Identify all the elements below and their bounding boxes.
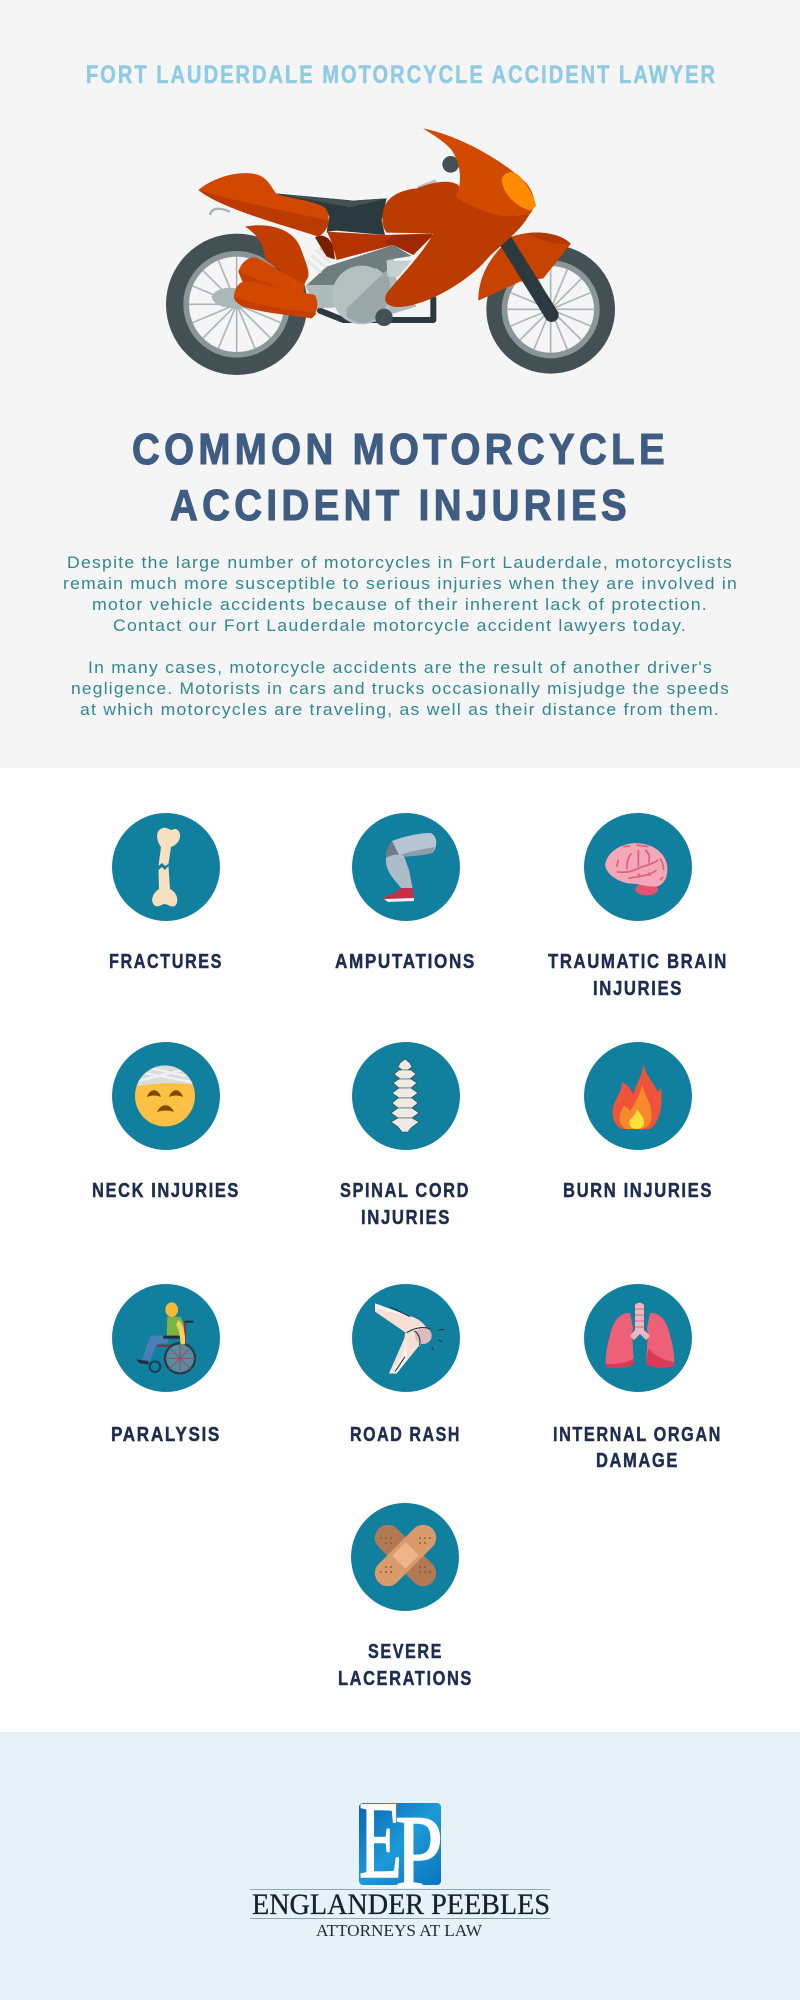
item: internal organ damage [553,1284,722,1472]
icon: bandaged face [112,1042,220,1150]
logo mark: P [395,1793,443,1910]
item: spinal cord injuries [340,1042,470,1229]
label: INJURIES [593,977,683,1000]
item: road rash [350,1284,461,1446]
label: ROAD RASH [350,1423,461,1446]
tagline: ATTORNEYS AT LAW [316,1921,482,1940]
label: INJURIES [361,1206,451,1229]
label: SEVERE [368,1640,443,1663]
icon: scraped knee [352,1284,460,1392]
item: burn injuries [563,1042,713,1202]
text block: intro paragraph: Despite the large number of motorcycles in Fort Lauderdale, motorcyclists [67,553,733,572]
panel: footer [0,1732,800,2000]
heading [132,425,669,530]
icon: broken bone [112,813,220,921]
icon: prosthetic leg [352,813,460,921]
text block: intro paragraph: Contact our Fort Lauderdale motorcycle accident lawyers today. [113,616,687,635]
icon: wheelchair user [112,1284,220,1392]
label: DAMAGE [596,1449,679,1472]
illustration: motorcycle [166,128,615,375]
label: TRAUMATIC BRAIN [548,950,728,973]
label [548,950,728,1000]
icon: crossed bandages [351,1503,459,1611]
icon: brain [584,813,692,921]
heading: ACCIDENT INJURIES [170,481,631,530]
label: NECK INJURIES [92,1179,240,1202]
item: traumatic brain injuries [548,813,728,1000]
label: SPINAL CORD [340,1179,470,1202]
heading: COMMON MOTORCYCLE [132,425,669,474]
icon: spine [352,1042,460,1150]
item: amputations [335,813,476,973]
item: paralysis [111,1284,221,1446]
text block: intro paragraph [63,553,738,635]
text block: second paragraph: In many cases, motorcycle accidents are the result of another driver's [88,658,713,677]
icon: lungs [584,1284,692,1392]
label: BURN INJURIES [563,1179,713,1202]
logo: Englander Peebles [250,1779,550,1940]
text block: second paragraph [71,658,730,719]
firm name: ENGLANDER PEEBLES [252,1888,550,1921]
label: INTERNAL ORGAN [553,1423,722,1446]
item: severe lacerations [338,1503,473,1690]
text block: intro paragraph: motor vehicle accidents because of their inherent lack of protection. [92,595,708,614]
logo mark: E [359,1779,402,1901]
label: AMPUTATIONS [335,950,476,973]
label: PARALYSIS [111,1423,221,1446]
label [340,1179,470,1229]
icon: flame [584,1042,692,1150]
label: FRACTURES [109,950,223,973]
text block: second paragraph: negligence. Motorists in cars and trucks occasionally misjudge the speeds [71,679,730,698]
panel: header [0,0,800,768]
item: fractures [109,813,223,973]
item: neck injuries [92,1042,240,1202]
text block: second paragraph: at which motorcycles are traveling, as well as their distance from them. [80,700,720,719]
engine body [305,257,417,323]
label: LACERATIONS [338,1667,473,1690]
text block: intro paragraph: remain much more susceptible to serious injuries when they are involved in [63,574,738,593]
panel: injuries [92,813,726,1686]
label [338,1640,473,1690]
label [553,1423,722,1472]
